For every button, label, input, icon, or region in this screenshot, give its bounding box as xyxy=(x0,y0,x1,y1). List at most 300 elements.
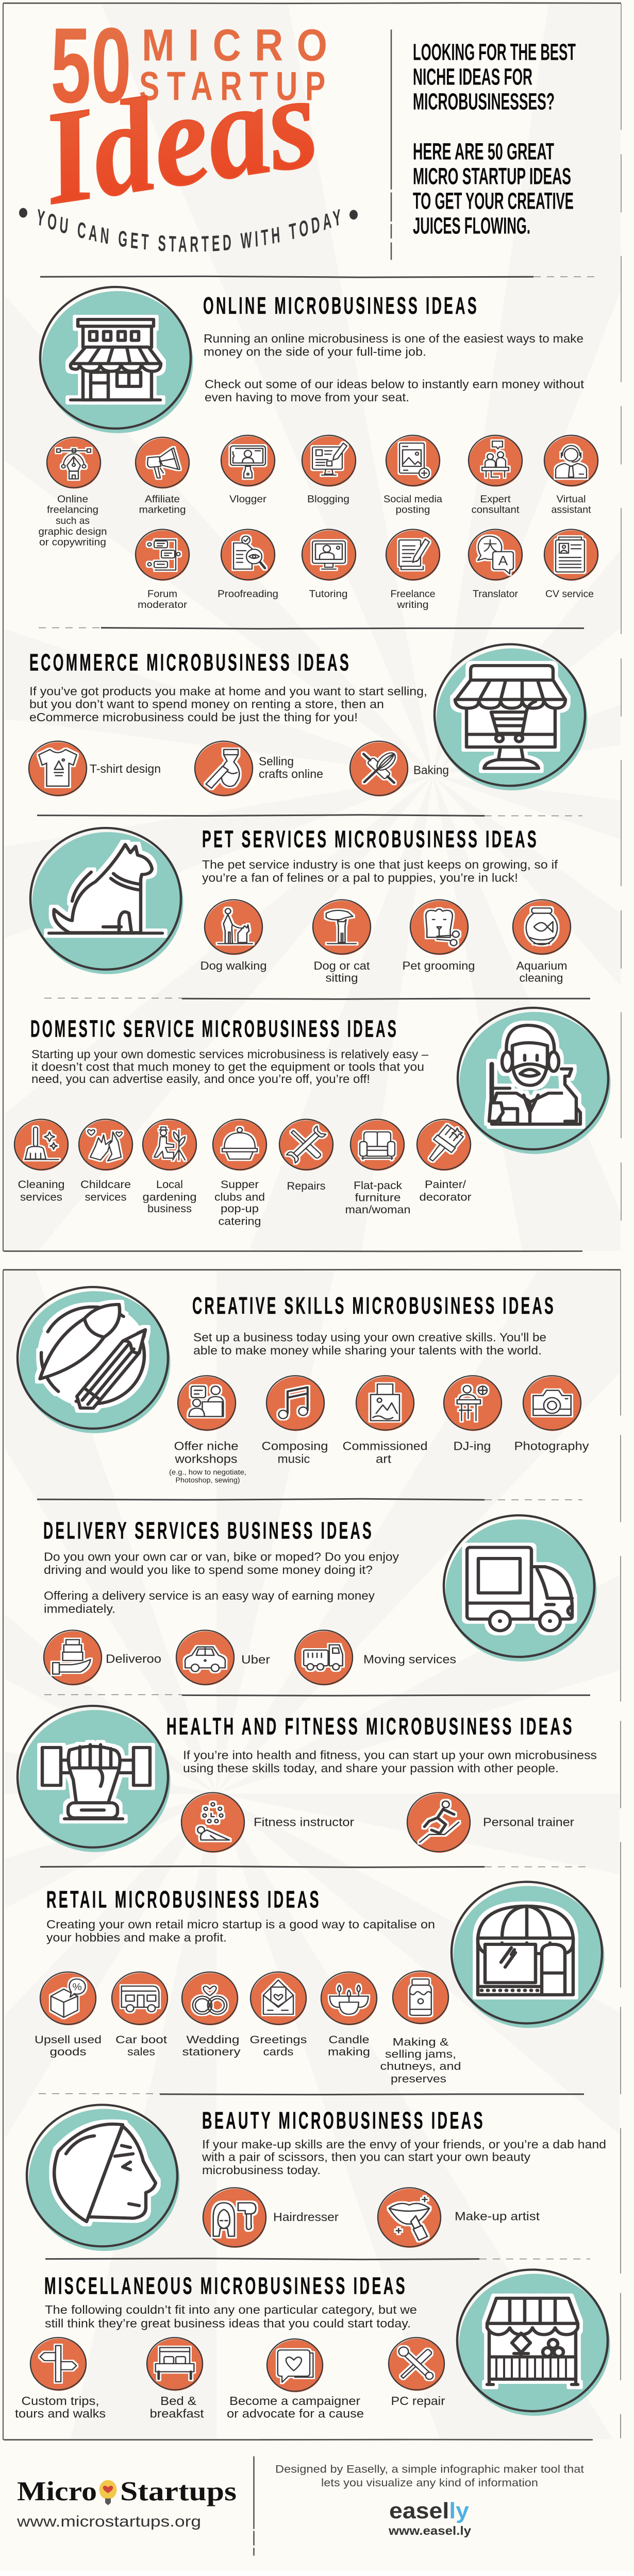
label: assistant xyxy=(551,504,591,515)
idea: composing music xyxy=(261,1376,328,1466)
label: services xyxy=(20,1191,62,1203)
idea: pet grooming xyxy=(402,900,475,972)
label: posting xyxy=(395,504,430,515)
icon: jam jar xyxy=(393,1971,449,2024)
idea: baking xyxy=(350,741,449,796)
label: DJ-ing xyxy=(453,1439,491,1453)
text block: Starting up your own domestic services microbusiness is relatively easy – xyxy=(31,1048,428,1061)
icon: sofa xyxy=(351,1120,405,1171)
icon: dog badge xyxy=(30,828,183,974)
label: Local xyxy=(156,1178,183,1191)
idea: vlogger xyxy=(221,435,275,505)
label: Wedding xyxy=(187,2033,239,2046)
icon: moving truck xyxy=(295,1630,353,1686)
icon: signpost xyxy=(30,2337,87,2391)
label: Deliveroo xyxy=(106,1652,161,1666)
icon: megaphone xyxy=(136,437,190,488)
label: stationery xyxy=(182,2045,241,2058)
title: 50: 50 xyxy=(51,6,131,125)
panel frame: lower xyxy=(3,1269,621,2440)
label: Photoshop, sewing) xyxy=(175,1477,240,1484)
label: crafts online xyxy=(259,768,323,781)
label: Online xyxy=(57,494,88,505)
idea: social media posting xyxy=(383,435,443,515)
label xyxy=(142,1178,196,1215)
label xyxy=(149,2395,204,2420)
label xyxy=(261,1439,328,1466)
icon: box with discount tag xyxy=(40,1972,96,2025)
icon: storefront badge xyxy=(40,287,193,433)
label: services xyxy=(85,1191,126,1203)
label: Upsell used xyxy=(35,2033,102,2046)
label xyxy=(35,2033,102,2058)
text block: The following couldn’t fit into any one particular category, but we xyxy=(45,2303,417,2317)
text block: Offering a delivery service is an easy way of earning money xyxy=(44,1589,375,1603)
idea: forum moderator xyxy=(136,529,190,611)
label: Social media xyxy=(383,494,443,505)
heading: ECOMMERCE MICROBUSINESS IDEAS xyxy=(29,650,351,676)
icon: translation bubbles: 大 xyxy=(483,538,497,554)
icon: dog walker xyxy=(205,900,263,955)
label: Tutoring xyxy=(309,589,347,600)
icon: lips and lipstick xyxy=(378,2188,441,2248)
label xyxy=(214,1178,265,1228)
credit text: Designed by Easelly, a simple infographic maker tool that xyxy=(275,2463,585,2475)
text block: but you don’t want to spend money on renting a store, then an xyxy=(29,698,384,711)
label: clubs and xyxy=(214,1191,265,1203)
idea: blogging xyxy=(302,435,356,505)
idea: t-shirt design xyxy=(29,741,161,796)
background rays: lower panel xyxy=(4,1270,620,2439)
idea: uber xyxy=(176,1630,270,1686)
label: or copywriting xyxy=(39,537,106,548)
label: Uber xyxy=(241,1653,270,1667)
logo: Micro Startups: Startups xyxy=(120,2477,237,2506)
idea: candle making xyxy=(321,1972,377,2058)
panel: ecommerce microbusiness ideas xyxy=(29,644,588,796)
idea: expert consultant xyxy=(469,435,523,515)
text block: need, you can advertise easily, and once you’re off, you’re off! xyxy=(31,1073,370,1086)
panel: retail microbusiness ideas xyxy=(35,1882,604,2085)
idea: greetings cards xyxy=(249,1972,307,2058)
logo: easelly: easelly xyxy=(389,2499,469,2523)
label: Translator xyxy=(473,589,518,600)
icon: social post xyxy=(386,435,440,487)
label: Dog or cat xyxy=(313,959,370,972)
label: Affiliate xyxy=(145,494,180,505)
label: CV service xyxy=(545,589,594,600)
label xyxy=(115,2033,168,2058)
idea: proofreading xyxy=(218,529,278,600)
panel: miscellaneous microbusiness ideas xyxy=(15,2269,610,2420)
label: Vlogger xyxy=(229,494,266,505)
idea: tutoring xyxy=(302,529,356,600)
label xyxy=(471,494,520,515)
idea: dog walking xyxy=(200,900,266,972)
label: furniture xyxy=(355,1191,401,1204)
text block xyxy=(204,332,584,404)
label: Flat-pack xyxy=(354,1179,403,1192)
icon: forum threads xyxy=(136,529,190,581)
label xyxy=(328,2033,370,2058)
panel: creative skills microbusiness ideas xyxy=(18,1287,589,1484)
label: Forum xyxy=(147,589,177,600)
icon: wrench and screwdriver xyxy=(279,1120,333,1171)
icon: yoga stretch xyxy=(181,1792,245,1853)
idea: hairdresser xyxy=(203,2188,339,2248)
icon: document with magnifier xyxy=(221,529,275,581)
label: Freelance xyxy=(390,589,435,600)
label xyxy=(313,959,370,984)
label: sitting xyxy=(326,971,358,984)
label: man/woman xyxy=(345,1204,410,1216)
label: such as xyxy=(56,516,90,527)
text block xyxy=(202,2138,606,2177)
panel: pet services microbusiness ideas xyxy=(30,826,571,984)
text block: using these skills today, and share your passion with other people. xyxy=(183,1762,559,1775)
label: Car boot xyxy=(115,2033,168,2046)
icon: hand petting cat xyxy=(313,900,371,955)
intro text xyxy=(413,39,576,239)
icon: hair and dryer xyxy=(203,2188,266,2248)
title: MICRO: MICRO xyxy=(142,21,327,71)
icon: dog with scissors xyxy=(410,900,469,955)
icon: broom and sparkles xyxy=(14,1120,69,1171)
icon: headset person xyxy=(544,435,598,487)
idea: translator xyxy=(469,529,523,600)
idea: local gardening business xyxy=(142,1120,197,1215)
text block: still think they’re great business ideas that you could start today. xyxy=(45,2317,411,2330)
label: art xyxy=(376,1452,391,1466)
idea: bed and breakfast xyxy=(147,2337,204,2420)
label: Greetings xyxy=(249,2033,307,2046)
idea: personal trainer xyxy=(407,1792,574,1853)
label: goods xyxy=(49,2045,86,2058)
idea: moving services xyxy=(295,1630,456,1686)
label: writing xyxy=(396,599,428,611)
label: graphic design xyxy=(38,526,107,537)
text block xyxy=(46,1918,435,1944)
text block: Creating your own retail micro startup is a good way to capitalise on xyxy=(46,1918,435,1931)
label: Moving services xyxy=(363,1653,456,1666)
label: Pet grooming xyxy=(402,959,475,972)
intro text: JUICES FLOWING. xyxy=(413,213,530,239)
text block xyxy=(29,685,427,724)
idea: repairs xyxy=(279,1120,333,1192)
idea: custom trips xyxy=(15,2337,106,2420)
label: Photography xyxy=(514,1439,589,1453)
label: Supper xyxy=(221,1178,259,1191)
label: breakfast xyxy=(149,2407,204,2420)
icon: cleaner person badge xyxy=(458,1008,610,1154)
icon: head profile badge xyxy=(27,2105,179,2251)
text block: with a pair of scissors, then you can start your own beauty xyxy=(202,2150,531,2164)
intro text: NICHE IDEAS FOR xyxy=(413,64,532,90)
label: Baking xyxy=(413,764,449,777)
idea: virtual assistant xyxy=(544,435,598,515)
icon: cloche xyxy=(213,1120,267,1171)
label xyxy=(259,755,323,781)
label xyxy=(390,589,435,611)
label: or advocate for a cause xyxy=(227,2407,364,2420)
label xyxy=(138,589,187,611)
idea: upsell used goods xyxy=(35,1972,102,2058)
text block: If your make-up skills are the envy of your friends, or you’re a dab hand xyxy=(202,2138,606,2151)
text block: If you’ve got products you make at home and you want to start selling, xyxy=(29,685,427,698)
icon: translation bubbles: A xyxy=(498,553,508,568)
label: cleaning xyxy=(519,971,563,984)
icon: hand holding packages xyxy=(44,1630,102,1686)
label xyxy=(383,494,443,515)
icon: whisk and rolling pin xyxy=(350,741,408,796)
text block: Do you own your own car or van, bike or moped? Do you enjoy xyxy=(44,1550,399,1564)
icon: papers and pen xyxy=(386,529,440,581)
idea: photography xyxy=(514,1376,589,1453)
text block xyxy=(183,1749,597,1775)
label: Fitness instructor xyxy=(254,1816,354,1829)
title: Ideas: Ideas xyxy=(31,46,327,232)
idea: commissioned art xyxy=(342,1376,428,1466)
icon: market stall badge xyxy=(457,2269,610,2416)
label: Making & xyxy=(392,2036,449,2048)
label xyxy=(139,494,186,515)
icon: dumbbell badge xyxy=(18,1706,170,1852)
icon: online tutor screen xyxy=(302,529,356,581)
label: workshops xyxy=(174,1452,238,1466)
icon: crossed tools xyxy=(389,2337,445,2391)
icon: delivery truck badge xyxy=(444,1515,597,1662)
label: Virtual xyxy=(556,494,586,505)
idea: wedding stationery xyxy=(182,1972,241,2058)
label xyxy=(345,1179,410,1216)
title block xyxy=(19,6,358,252)
logo: Micro Startups: Micro xyxy=(17,2477,97,2506)
icon: DJ at decks xyxy=(444,1376,502,1431)
panel: health and fitness microbusiness ideas xyxy=(18,1706,597,1853)
icon: bed xyxy=(147,2337,203,2391)
label: chutneys, and xyxy=(380,2060,461,2073)
label: Candle xyxy=(328,2033,369,2046)
text block: money on the side of your full-time job. xyxy=(204,345,426,359)
icon: envelope with card xyxy=(251,1972,307,2025)
idea: flat-pack furniture man/woman xyxy=(345,1120,410,1216)
label: Painter/ xyxy=(425,1178,466,1191)
panel: delivery services business ideas xyxy=(43,1515,597,1686)
label xyxy=(80,1178,131,1203)
label: Commissioned xyxy=(342,1439,428,1453)
text block: microbusiness today. xyxy=(202,2164,321,2177)
idea: dog or cat sitting xyxy=(313,900,371,984)
icon: vase and brush xyxy=(195,741,253,796)
label: Become a campaigner xyxy=(229,2395,360,2408)
idea: affiliate marketing xyxy=(136,437,190,515)
label: selling jams, xyxy=(385,2048,456,2060)
label: tours and walks xyxy=(15,2407,106,2420)
idea: cleaning services xyxy=(14,1120,69,1203)
icon: camera xyxy=(523,1376,581,1431)
text block: immediately. xyxy=(44,1602,115,1616)
website url: www.microstartups.org xyxy=(16,2514,201,2530)
icon: workshop xyxy=(178,1376,236,1431)
label xyxy=(15,2395,106,2420)
icon: retail store badge xyxy=(452,1882,604,2028)
title: STARTUP: STARTUP xyxy=(139,63,325,109)
title: curved subtitle: YOU CAN GET STARTED WITH TODAY xyxy=(38,209,340,252)
label xyxy=(551,494,591,515)
label: catering xyxy=(219,1215,261,1228)
label: business xyxy=(147,1202,192,1215)
easelly url: www.easel.ly xyxy=(388,2524,472,2538)
icon: music notes xyxy=(266,1376,325,1431)
idea: aquarium cleaning xyxy=(513,900,571,984)
text block: The pet service industry is one that just keeps on growing, so if xyxy=(202,858,558,872)
label xyxy=(227,2395,364,2420)
heading: RETAIL MICROBUSINESS IDEAS xyxy=(46,1887,321,1913)
icon: speech bubble with heart xyxy=(267,2339,323,2392)
label: PC repair xyxy=(391,2395,445,2408)
icon: pen tool xyxy=(47,437,101,488)
label: Repairs xyxy=(287,1180,325,1192)
icon: paint brush xyxy=(417,1120,471,1171)
idea: PC repair xyxy=(389,2337,445,2408)
label: freelancing xyxy=(47,504,98,515)
label: decorator xyxy=(420,1191,472,1203)
idea: CV service xyxy=(544,529,598,600)
idea: DJ-ing xyxy=(444,1376,502,1453)
label: Offer niche xyxy=(174,1439,238,1453)
icon: wedding rings xyxy=(182,1972,238,2025)
label: T-shirt design xyxy=(90,762,161,776)
icon: monitor and pencil xyxy=(302,435,356,487)
label xyxy=(18,1178,65,1203)
text block: Check out some of our ideas below to instantly earn money without xyxy=(205,378,584,391)
label: making xyxy=(328,2045,370,2058)
label xyxy=(342,1439,428,1466)
icon: hands and hearts xyxy=(79,1120,133,1171)
icon: car xyxy=(176,1630,235,1686)
idea: offer niche workshops xyxy=(169,1376,246,1484)
label xyxy=(380,2036,461,2085)
label: Personal trainer xyxy=(483,1816,574,1829)
panel: domestic service microbusiness ideas xyxy=(14,1008,610,1228)
label: cards xyxy=(263,2045,293,2058)
text block xyxy=(193,1331,546,1358)
text block: Running an online microbusiness is one of the easiest ways to make xyxy=(204,332,583,346)
text block: even having to move from your seat. xyxy=(205,391,409,404)
idea: make-up artist xyxy=(378,2188,540,2248)
background rays: upper panel xyxy=(4,4,621,1251)
credit text xyxy=(275,2463,585,2489)
text block: your hobbies and make a profit. xyxy=(46,1931,227,1944)
idea: car boot sales xyxy=(112,1972,168,2058)
idea: selling crafts online xyxy=(195,741,323,796)
panel: online microbusiness ideas xyxy=(38,287,598,611)
label: gardening xyxy=(142,1191,196,1203)
panel: beauty microbusiness ideas xyxy=(27,2105,606,2251)
icon: translation bubbles xyxy=(469,529,523,581)
icon: resume xyxy=(544,529,598,581)
label: Hairdresser xyxy=(273,2211,339,2224)
label: Composing xyxy=(261,1439,328,1453)
text block xyxy=(45,2303,417,2330)
label xyxy=(38,494,107,548)
idea: supper clubs and pop-up catering xyxy=(213,1120,267,1228)
label: moderator xyxy=(138,599,187,611)
logo: Micro Startups xyxy=(17,2477,237,2506)
vertical divider xyxy=(391,29,392,260)
idea: online freelancing xyxy=(38,437,107,548)
label xyxy=(249,2033,307,2058)
label: Blogging xyxy=(307,494,349,505)
text block: it doesn’t cost that much money to get the equipment or tools that you xyxy=(31,1060,424,1074)
idea: fitness instructor xyxy=(181,1792,354,1853)
idea: making and selling jams xyxy=(380,1971,461,2085)
label xyxy=(420,1178,472,1203)
panel frame: upper xyxy=(3,3,621,1251)
label: Dog walking xyxy=(200,959,266,972)
idea: childcare services xyxy=(79,1120,133,1203)
label: pop-up xyxy=(221,1202,259,1215)
text block xyxy=(202,858,558,885)
icon: phone on stick xyxy=(221,435,275,487)
footer xyxy=(16,2456,585,2555)
label: Childcare xyxy=(80,1178,131,1191)
idea: freelance writing xyxy=(386,529,440,611)
label: preserves xyxy=(391,2073,446,2085)
label: sales xyxy=(127,2045,155,2058)
icon: fish bowl xyxy=(513,900,571,955)
idea: deliveroo xyxy=(44,1630,161,1686)
text block: able to make money while sharing your talents with the world. xyxy=(193,1344,542,1358)
label: Selling xyxy=(259,755,294,769)
label: Aquarium xyxy=(516,959,567,972)
text block xyxy=(44,1550,399,1616)
icon: online store monitor badge xyxy=(435,644,588,790)
label: marketing xyxy=(139,504,186,515)
label: music xyxy=(277,1452,310,1466)
label: Custom trips, xyxy=(22,2395,99,2408)
icon: consultant desk xyxy=(469,435,523,487)
text block: eCommerce microbusiness could be just the thing for you! xyxy=(29,711,358,724)
credit text: lets you visualize any kind of information xyxy=(321,2477,538,2489)
label: Proofreading xyxy=(218,589,278,600)
icon: runner xyxy=(407,1792,471,1853)
icon: t-shirt xyxy=(29,741,87,796)
label: Make-up artist xyxy=(455,2210,540,2223)
text block xyxy=(31,1048,428,1086)
idea: campaigner or advocate xyxy=(227,2339,364,2420)
text block: you’re a fan of felines or a pal to puppies, you’re in luck! xyxy=(202,871,518,885)
text block: Set up a business today using your own creative skills. You’ll be xyxy=(193,1331,546,1344)
text block: driving and would you like to spend some money doing it? xyxy=(44,1564,373,1577)
icon: brush and pencil badge xyxy=(18,1287,170,1433)
idea: painter/decorator xyxy=(417,1120,472,1203)
icon: gardener and plant xyxy=(143,1120,197,1171)
icon: framed picture xyxy=(356,1376,414,1431)
label xyxy=(182,2033,241,2058)
label: Cleaning xyxy=(18,1178,65,1191)
label xyxy=(169,1439,246,1484)
label: Bed & xyxy=(160,2395,196,2408)
label: Expert xyxy=(480,494,511,505)
label: consultant xyxy=(471,504,520,515)
icon: box with discount tag: % xyxy=(72,1981,82,1993)
icon: candles xyxy=(321,1972,377,2025)
label xyxy=(516,959,567,984)
label: (e.g., how to negotiate, xyxy=(169,1469,246,1477)
text block: If you’re into health and fitness, you can start up your own microbusiness xyxy=(183,1749,597,1762)
icon: light bulb with heart xyxy=(99,2480,116,2505)
